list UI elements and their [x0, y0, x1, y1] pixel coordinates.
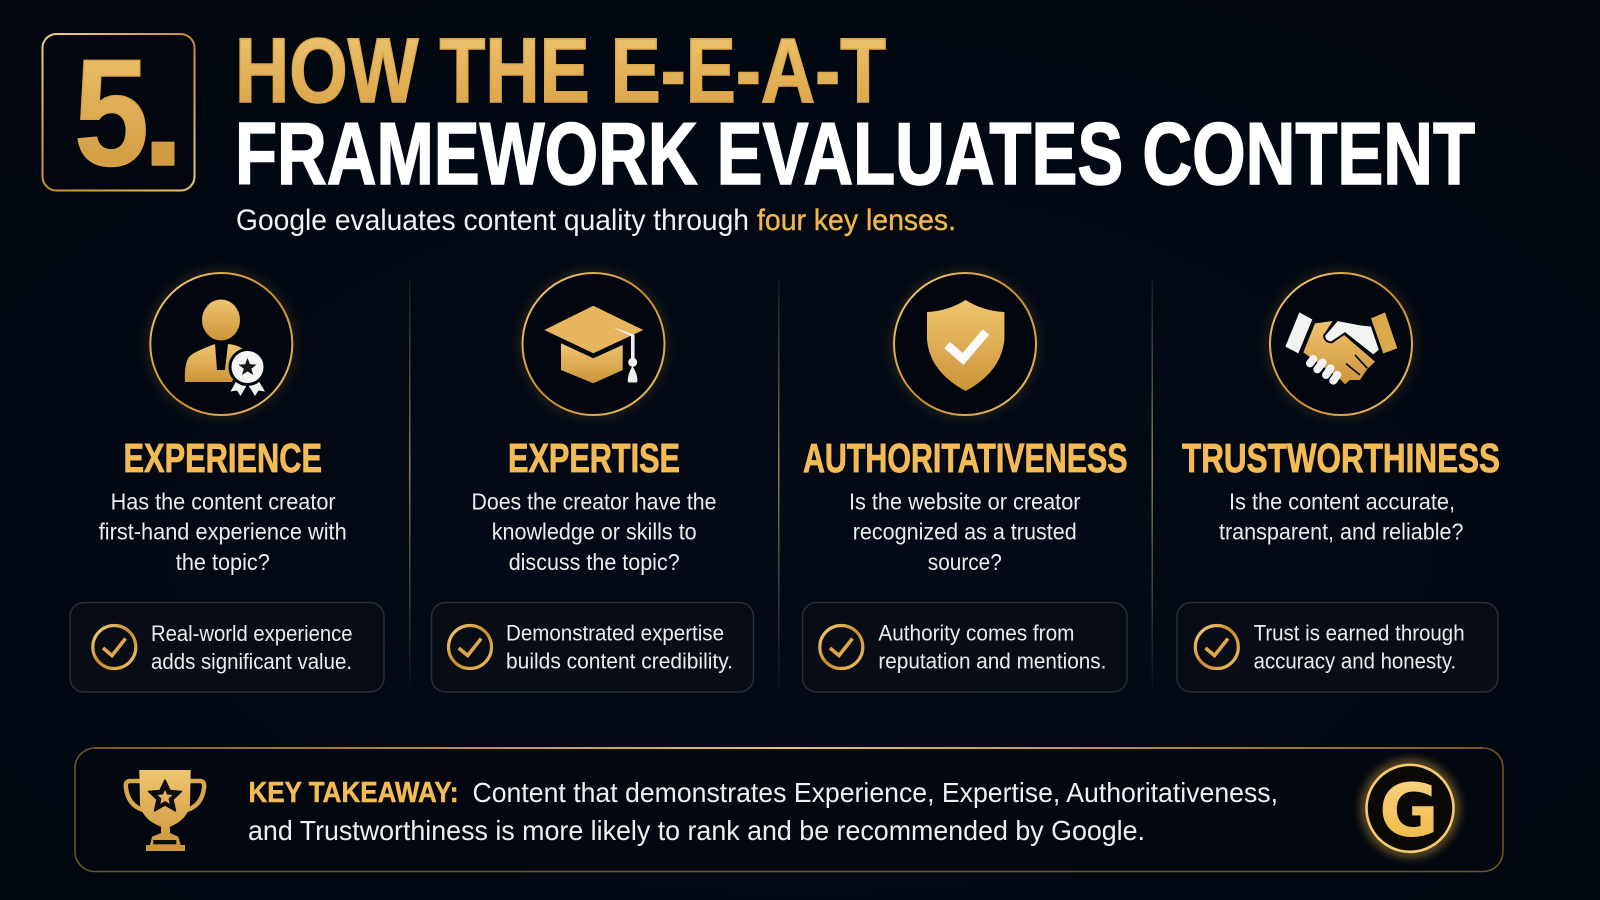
subtitle: four key lenses.	[757, 204, 956, 237]
panel: key takeaway	[75, 747, 1503, 872]
takeaway text: Content that demonstrates Experience, Expertise, Authoritativeness,	[472, 777, 1278, 808]
callout: authoritativeness: Authority comes from	[878, 620, 1074, 646]
heading: expertise: EXPERTISE	[508, 435, 680, 481]
description: expertise	[472, 488, 716, 575]
description: experience: the topic?	[176, 549, 270, 575]
number badge	[42, 28, 194, 198]
description: expertise: discuss the topic?	[509, 549, 680, 575]
icon: trophy	[126, 770, 204, 851]
takeaway text	[248, 777, 1278, 846]
callout: authoritativeness: reputation and mentions.	[878, 648, 1106, 674]
icon: shield with check	[894, 272, 1036, 416]
description: authoritativeness: Is the website or creator	[849, 488, 1081, 514]
description: expertise: Does the creator have the	[472, 488, 716, 514]
callout: expertise: Demonstrated expertise	[506, 620, 724, 646]
panel: trustworthiness	[1177, 272, 1500, 692]
description: trustworthiness	[1219, 488, 1464, 544]
callout: experience: adds significant value.	[151, 649, 352, 674]
icon: graduation cap	[522, 272, 665, 416]
description: authoritativeness	[849, 488, 1081, 575]
icon: handshake	[1270, 272, 1412, 416]
takeaway text: and Trustworthiness is more likely to rank and be recommended by Google.	[248, 815, 1145, 846]
description: trustworthiness: transparent, and reliable?	[1219, 518, 1464, 544]
description: authoritativeness: recognized as a trusted	[853, 518, 1077, 544]
description: experience: Has the content creator	[111, 488, 336, 514]
callout: trustworthiness	[1177, 602, 1498, 692]
description: expertise: knowledge or skills to	[492, 518, 697, 544]
description: experience: first-hand experience with	[99, 518, 347, 544]
heading: authoritativeness: AUTHORITATIVENESS	[803, 435, 1128, 481]
takeaway text: KEY TAKEAWAY:	[248, 777, 458, 809]
panel: authoritativeness	[802, 272, 1128, 692]
panel: experience	[70, 272, 384, 692]
callout: trustworthiness: Trust is earned through	[1254, 620, 1465, 646]
callout: experience: Real-world experience	[151, 621, 352, 646]
title: HOW THE E-E-A-T	[235, 20, 886, 122]
number badge: .	[142, 28, 184, 198]
description: authoritativeness: source?	[928, 549, 1002, 575]
subtitle: Google evaluates content quality through	[236, 204, 749, 237]
icon: person with award ribbon	[150, 272, 293, 416]
number badge: 5	[74, 28, 149, 198]
panel: expertise	[432, 272, 754, 692]
heading: trustworthiness: TRUSTWORTHINESS	[1182, 435, 1500, 481]
icon: Google G badge	[1366, 764, 1454, 854]
callout: trustworthiness: accuracy and honesty.	[1254, 648, 1456, 674]
callout: expertise	[432, 602, 754, 692]
callout: expertise: builds content credibility.	[506, 648, 733, 674]
icon: Google G badge: G	[1379, 769, 1439, 854]
description: experience	[99, 488, 347, 575]
callout: experience	[70, 602, 384, 692]
heading: experience: EXPERIENCE	[124, 435, 322, 481]
title	[235, 20, 1475, 203]
callout: authoritativeness	[802, 602, 1127, 692]
description: trustworthiness: Is the content accurate,	[1229, 488, 1455, 514]
